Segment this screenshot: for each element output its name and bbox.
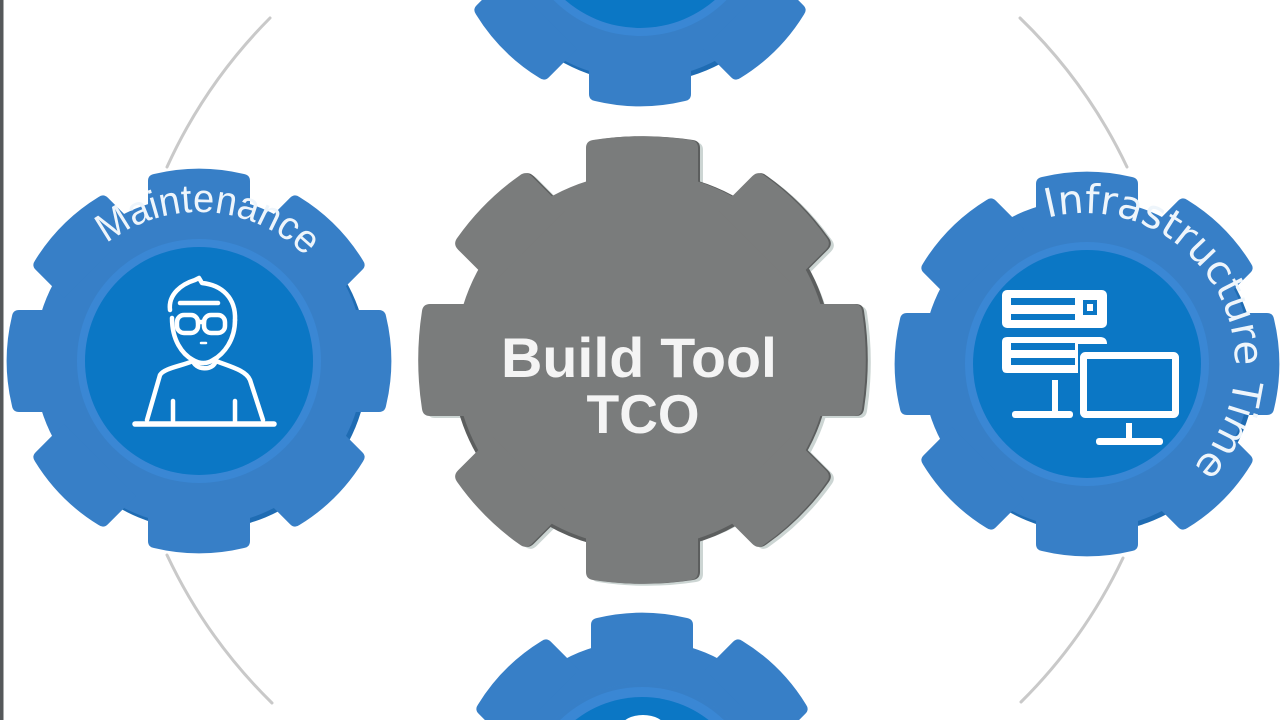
left edge line [0,0,4,720]
center subtitle: TCO [586,383,700,445]
top gear (cropped) [448,0,832,106]
connecting orbit arcs [167,18,1127,703]
left gear: Maintenance [6,168,392,554]
center title: Build Tool [501,326,777,389]
center gear: Build Tool TCO [418,136,871,586]
icon: servers and monitor [1002,290,1176,445]
right gear: Infrastructure Time [894,172,1280,556]
icon: person with glasses at desk [135,278,274,424]
label: Infrastructure Time: Infrastructure Time [1044,183,1264,476]
label: Maintenance: Maintenance [94,186,316,252]
bottom gear (cropped) [450,613,834,720]
